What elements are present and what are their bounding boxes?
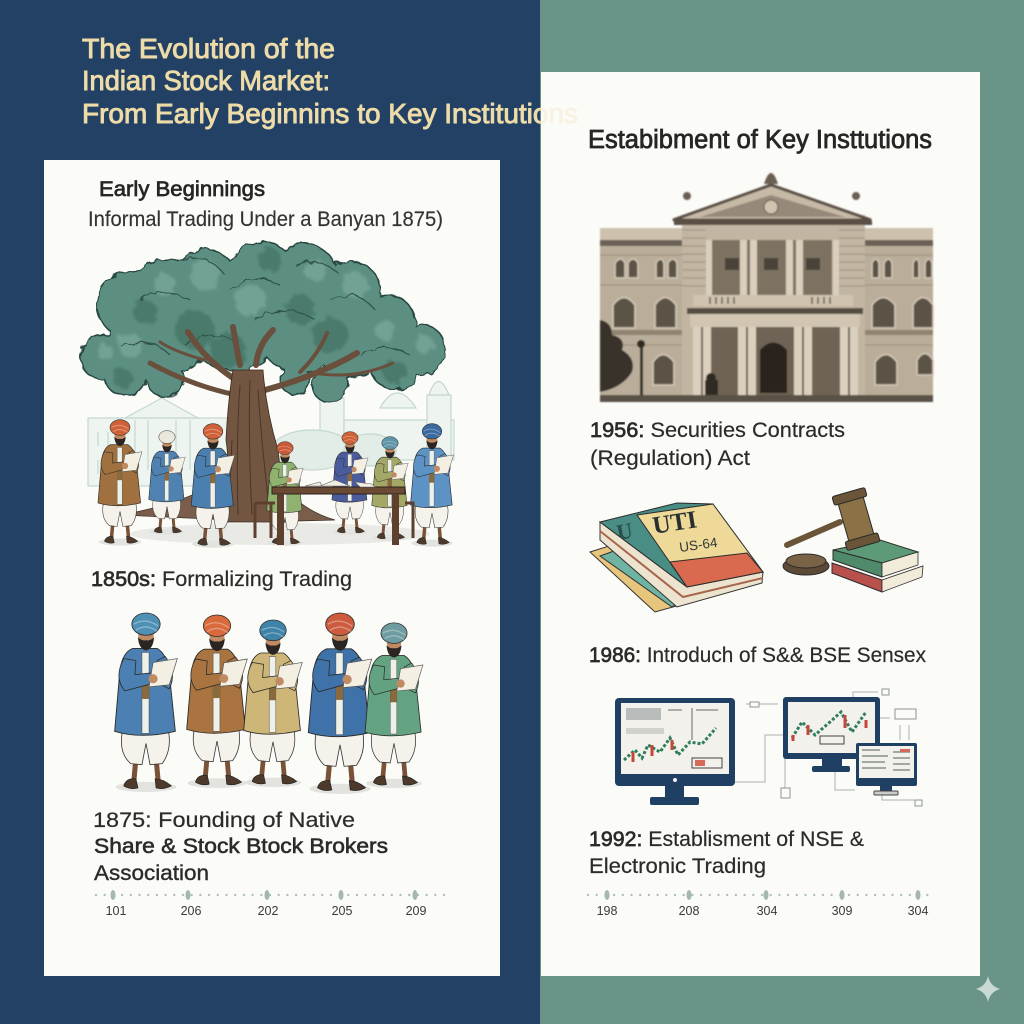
balustrade bbox=[693, 295, 853, 306]
traders standing left bbox=[98, 420, 235, 548]
teal book bbox=[600, 503, 713, 587]
illustration: UTI books: US-64 bbox=[678, 535, 719, 555]
caption: 1992 bbox=[589, 827, 864, 878]
sound block bbox=[783, 557, 829, 575]
main door bbox=[760, 342, 787, 393]
upper portico bbox=[712, 240, 832, 296]
timeline: left: 202 bbox=[258, 904, 278, 918]
illustration: electronic trading monitors bbox=[615, 689, 922, 806]
timeline: right: 304 bbox=[757, 904, 777, 918]
caption: 1850s: 1850s: Formalizing Trading bbox=[91, 567, 352, 591]
lower cornice bbox=[687, 308, 863, 314]
monitor left bbox=[615, 698, 735, 805]
panel: key institutions bbox=[541, 72, 980, 976]
traders seated and standing right bbox=[267, 424, 454, 547]
background colonial building left bbox=[88, 398, 228, 486]
illustration: banyan tree scene bbox=[81, 243, 454, 548]
caption: 1875 founding: Association bbox=[94, 861, 209, 885]
gavel handle bbox=[787, 522, 840, 545]
timeline: left: 101 bbox=[106, 904, 126, 918]
background: navy left half bbox=[0, 0, 540, 1024]
heading: early beginnings: Early Beginnings bbox=[99, 178, 265, 201]
timeline: right: 208 bbox=[679, 904, 699, 918]
ground shadow bbox=[130, 523, 430, 545]
caption: 1875 founding: Share & Stock Btock Brokers bbox=[94, 834, 388, 858]
illustration: UTI books: U bbox=[615, 518, 635, 545]
illustration: UTI books bbox=[590, 503, 763, 612]
background: teal right half bbox=[540, 0, 1024, 1024]
timeline: right bbox=[588, 890, 934, 918]
lamp post and visitor bbox=[637, 340, 718, 402]
canopy contour lines bbox=[120, 258, 410, 355]
timeline: left: 205 bbox=[332, 904, 352, 918]
tree trunk bbox=[222, 370, 292, 522]
panel: early beginnings bbox=[44, 160, 500, 976]
caption: 1875 founding bbox=[93, 808, 388, 885]
central block bbox=[682, 215, 865, 402]
monitor right bbox=[856, 743, 917, 795]
heading: key institutions: Estabibment of Key Insttutions bbox=[588, 126, 932, 154]
caption: 1992: 1992: Establisment of NSE & bbox=[589, 827, 864, 851]
tree roots bbox=[120, 480, 335, 522]
title bbox=[82, 33, 578, 129]
timeline: left: 209 bbox=[406, 904, 426, 918]
foreground tree bbox=[600, 320, 633, 392]
background domed building right bbox=[272, 382, 454, 470]
tree branches bbox=[150, 327, 393, 395]
pediment bbox=[673, 185, 871, 220]
caption: 1875 founding: 1875: Founding of Native bbox=[93, 808, 355, 832]
illustration: five brokers bbox=[115, 613, 423, 794]
illustration: stock exchange building bbox=[600, 173, 933, 402]
connector lines bbox=[735, 692, 915, 800]
arched windows bbox=[613, 259, 933, 385]
lower stacked booklets bbox=[590, 545, 680, 612]
building wings bbox=[600, 228, 933, 402]
title: From Early Beginnins to Key Institutions bbox=[82, 98, 578, 129]
timeline: left: 206 bbox=[181, 904, 201, 918]
caption: 1986: 1986: Introduch of S&& BSE Sensex bbox=[589, 643, 926, 667]
icon: sparkle bbox=[976, 976, 1000, 1002]
timeline: right: 198 bbox=[597, 904, 617, 918]
tree canopy bbox=[81, 243, 445, 402]
trading table bbox=[255, 480, 413, 545]
timeline: right: 309 bbox=[832, 904, 852, 918]
illustration: gavel on law books bbox=[783, 487, 923, 592]
canopy shading bbox=[97, 248, 434, 388]
title: Indian Stock Market: bbox=[82, 65, 330, 96]
caption: 1956 act: 1956: Securities Contracts bbox=[590, 418, 845, 442]
UTI cover bbox=[637, 504, 763, 587]
caption: 1956 act bbox=[590, 418, 845, 470]
subheading: informal trading: Informal Trading Under a Banyan 1875) bbox=[88, 207, 443, 231]
caption: 1956 act: (Regulation) Act bbox=[590, 446, 750, 470]
small labels bbox=[750, 689, 922, 806]
law books bbox=[832, 563, 882, 592]
title: The Evolution of the bbox=[82, 33, 335, 64]
caption: 1992: Electronic Trading bbox=[589, 854, 766, 878]
gavel head bbox=[832, 487, 880, 551]
illustration: UTI books: UTI bbox=[651, 506, 699, 540]
timeline: right: 304 bbox=[908, 904, 928, 918]
timeline: left bbox=[96, 890, 447, 918]
lower portico bbox=[700, 327, 852, 395]
monitor centre bbox=[783, 697, 880, 772]
